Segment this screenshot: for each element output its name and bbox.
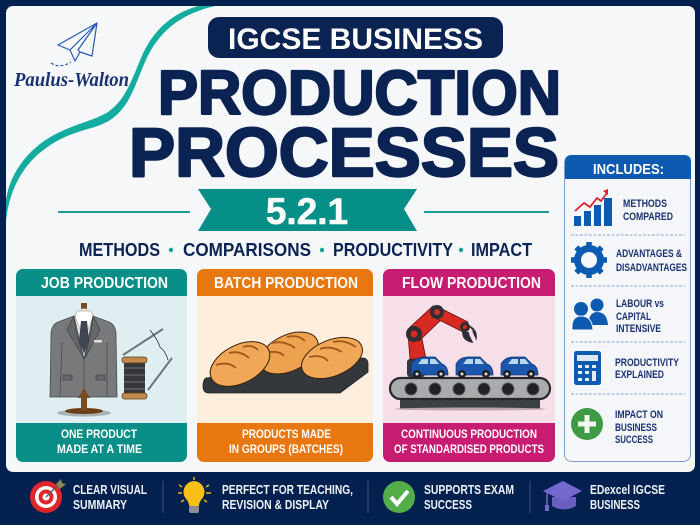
illustration: bread loaves <box>203 324 368 395</box>
footer item: perfect for teaching <box>178 477 353 513</box>
title: PROCESSES <box>129 114 559 191</box>
item: productivity explained: EXPLAINED <box>615 369 664 381</box>
title: PRODUCTION <box>158 59 561 128</box>
item: methods compared: METHODS <box>623 198 667 210</box>
panel: includes sidebar <box>564 155 691 462</box>
item: impact on business success: BUSINESS <box>615 422 657 434</box>
item: labour vs capital intensive <box>572 298 664 335</box>
subject pill: IGCSE BUSINESS: IGCSE BUSINESS <box>228 23 483 56</box>
subtitle keywords: METHODS <box>79 240 160 260</box>
icon: suit on stand <box>50 303 117 416</box>
footer item: edexcel igcse business: EDexcel IGCSE <box>590 483 665 497</box>
item: impact on business success <box>571 408 663 446</box>
ribbon: 5.2.1 <box>58 189 549 232</box>
subtitle keywords: PRODUCTIVITY <box>333 240 453 260</box>
heading: job production: JOB PRODUCTION <box>41 275 168 292</box>
item: methods compared <box>574 189 673 226</box>
caption: job production: ONE PRODUCT <box>61 429 137 441</box>
subject pill: IGCSE BUSINESS <box>208 17 503 58</box>
caption: flow production <box>394 429 544 456</box>
footer item: clear visual summary: CLEAR VISUAL <box>73 483 147 497</box>
footer item: supports exam success: SUCCESS <box>424 498 472 512</box>
icon: thread spool and needles <box>122 329 172 399</box>
teal swoosh <box>6 6 215 222</box>
panel: flow production <box>383 269 555 462</box>
caption: batch production <box>229 429 343 456</box>
item: productivity explained: PRODUCTIVITY <box>615 357 680 369</box>
footer item: clear visual summary <box>30 479 147 513</box>
footer item: edexcel igcse business: BUSINESS <box>590 498 640 512</box>
caption: batch production: IN GROUPS (BATCHES) <box>229 444 343 456</box>
item: productivity explained <box>574 351 680 385</box>
footer item: edexcel igcse business <box>543 481 665 512</box>
footer item: perfect for teaching: REVISION & DISPLAY <box>222 498 330 512</box>
heading: flow production: FLOW PRODUCTION <box>402 275 541 292</box>
logo: Paulus-Walton <box>13 23 129 91</box>
heading: batch production: BATCH PRODUCTION <box>214 275 358 292</box>
caption: batch production: PRODUCTS MADE <box>242 429 331 441</box>
footer item: perfect for teaching: PERFECT FOR TEACHING, <box>222 483 353 497</box>
illustration: conveyor belt <box>390 378 550 410</box>
subtitle keywords <box>79 240 532 260</box>
icon: paper plane <box>51 23 97 66</box>
caption: flow production: OF STANDARDISED PRODUCTS <box>394 444 544 456</box>
footer item: supports exam success: SUPPORTS EXAM <box>424 483 514 497</box>
footer item: clear visual summary: SUMMARY <box>73 498 128 512</box>
caption: job production <box>57 429 142 456</box>
item: methods compared: COMPARED <box>623 211 673 223</box>
footer item: supports exam success <box>383 481 514 513</box>
illustration: blue cars <box>411 357 538 378</box>
subtitle keywords: COMPARISONS <box>183 240 311 260</box>
item: labour vs capital intensive: CAPITAL <box>616 311 651 323</box>
title <box>129 59 561 191</box>
item: impact on business success: SUCCESS <box>615 434 653 446</box>
footer strip <box>30 477 665 513</box>
subtitle keywords: IMPACT <box>471 240 532 260</box>
item: labour vs capital intensive: INTENSIVE <box>616 323 661 335</box>
ribbon: 5.2.1: 5.2.1 <box>266 191 348 232</box>
illustration: robot arm <box>406 305 476 377</box>
caption: job production: MADE AT A TIME <box>57 444 142 456</box>
item: advantages and disadvantages: ADVANTAGES & <box>616 248 682 260</box>
item: labour vs capital intensive: LABOUR vs <box>616 298 664 310</box>
caption: flow production: CONTINUOUS PRODUCTION <box>401 429 537 441</box>
item: advantages and disadvantages <box>571 242 687 278</box>
logo wordmark: Paulus-Walton <box>13 69 129 91</box>
item: impact on business success: IMPACT ON <box>615 409 663 421</box>
panel: job production <box>16 269 187 462</box>
heading: includes: INCLUDES: <box>593 161 664 178</box>
illustration: baking tray <box>203 358 368 393</box>
panel: batch production <box>197 269 373 462</box>
